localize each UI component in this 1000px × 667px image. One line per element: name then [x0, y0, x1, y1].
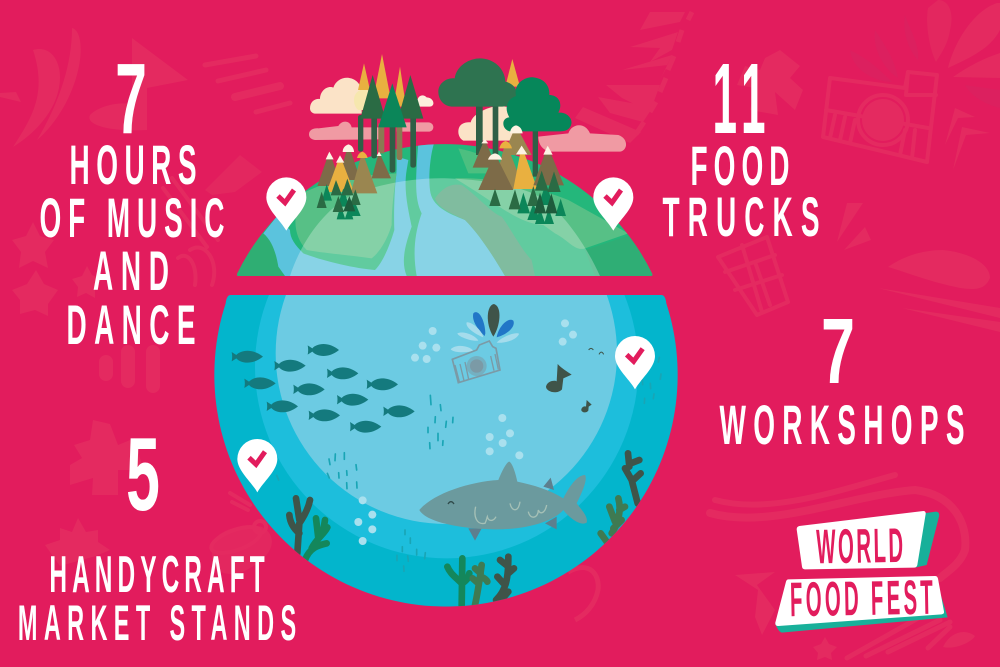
stat: 5 handycraft market stands: [18, 417, 296, 652]
logo text: food fest: FOOD FEST: [790, 569, 933, 627]
camera with splash: [451, 304, 519, 383]
logo: world food fest: [775, 511, 948, 633]
land hemisphere: [230, 140, 663, 280]
doodle: feather fan: [575, 12, 692, 143]
school of fish: [232, 344, 415, 433]
bubbles: [354, 319, 577, 545]
lower globe: ocean scene: [214, 295, 678, 607]
doodle: stars: [12, 222, 102, 316]
doodle: flower right: [737, 50, 803, 115]
shark: [419, 462, 587, 541]
label: handycraft: HANDYCRAFT: [49, 545, 265, 604]
doodle: cup: [208, 493, 272, 574]
logo shadows: [775, 512, 948, 633]
label: trucks: TRUCKS: [662, 187, 820, 249]
pin: left land: [266, 177, 306, 231]
number 11: 11: [712, 44, 766, 155]
number 7: 7: [821, 299, 855, 403]
label: market stands: MARKET STANDS: [18, 596, 296, 652]
pin: right land: [593, 177, 633, 231]
label: food: FOOD: [690, 136, 790, 198]
doodle: dashes: [205, 56, 290, 112]
yellow peaks: [358, 54, 520, 107]
doodle: petals right: [850, 0, 1000, 108]
stat: 7 workshops: [720, 299, 964, 457]
label: of music: OF MUSIC: [40, 188, 224, 250]
doodle: swirl behind logo: [710, 475, 975, 660]
doodle: chevrons: [837, 108, 990, 250]
doodle: guitar: [163, 155, 262, 285]
doodle: pills: [99, 345, 160, 393]
stat: 11 food trucks: [662, 44, 820, 249]
doodle: arc beside globe: [568, 568, 598, 620]
sea dashes: [277, 357, 661, 571]
clouds: [309, 78, 626, 152]
ocean hemisphere: [214, 295, 678, 607]
number 7: 7: [115, 43, 147, 155]
music notes: [546, 348, 604, 412]
doodle: leaf and strips right: [878, 250, 1000, 332]
pin: ocean right: [615, 336, 655, 389]
stat: 7 hours of music and dance: [40, 43, 224, 357]
label: workshops: WORKSHOPS: [719, 395, 965, 457]
doodle: burst: [45, 518, 110, 566]
label: hours: HOURS: [70, 135, 197, 197]
logo text: world: WORLD: [816, 518, 904, 574]
round trees: [438, 58, 572, 177]
doodle: flower left: [70, 420, 143, 495]
logo plates: [775, 511, 944, 626]
small pine clusters: [317, 171, 566, 224]
label: dance: DANCE: [66, 295, 196, 357]
upper globe: land, mountains and forest: [230, 54, 663, 280]
doodle: camera right: [823, 72, 937, 162]
seaweed: [289, 453, 641, 607]
doodle: trumpet: [89, 38, 188, 130]
doodle: map: [718, 237, 788, 315]
left pines: [358, 75, 423, 173]
mountains: [317, 125, 564, 193]
pin: ocean left: [237, 439, 277, 492]
number 5: 5: [126, 417, 160, 533]
label: and: AND: [93, 241, 169, 303]
doodle: swooshes top left: [0, 28, 81, 147]
